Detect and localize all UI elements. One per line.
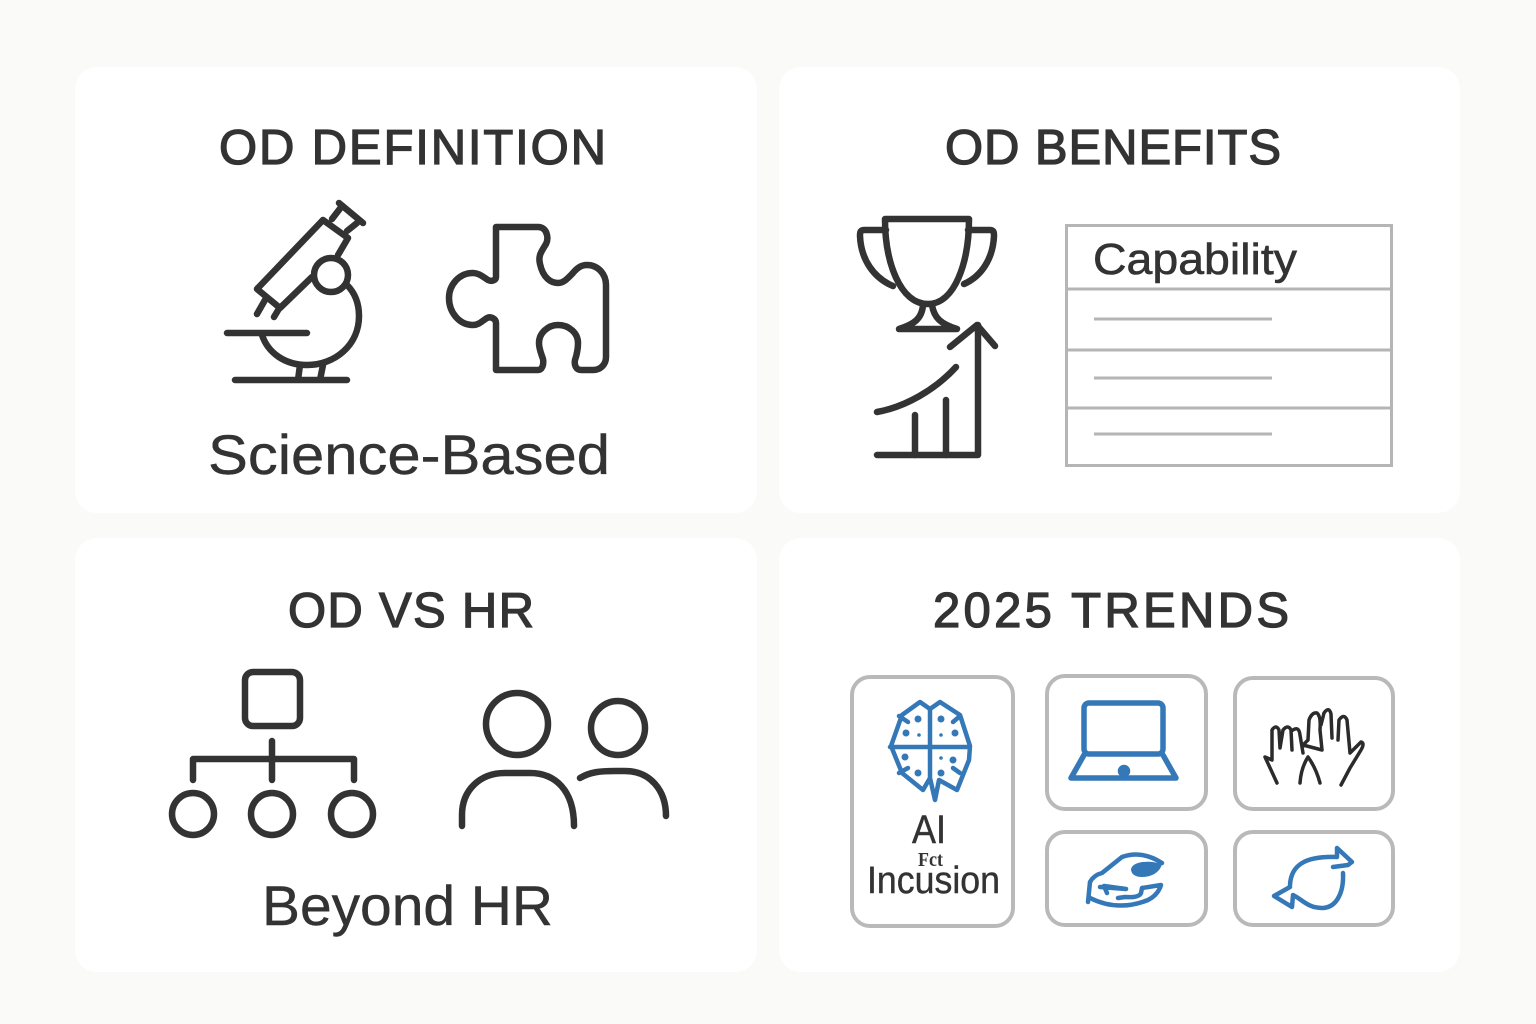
panel: OD definition bbox=[75, 67, 757, 513]
label: garbled small text: Fct bbox=[918, 849, 943, 871]
icon: laptop bbox=[1071, 703, 1176, 778]
icon: blue brain bbox=[890, 702, 970, 800]
heading: 2025 trends: 2025 TRENDS bbox=[933, 584, 1289, 638]
icon: raised hands bbox=[1265, 710, 1363, 785]
icon: growth chart with arrow bbox=[877, 325, 995, 455]
icon: org chart bbox=[172, 672, 373, 835]
icon: trophy bbox=[860, 219, 994, 329]
card: caring hand bbox=[1047, 832, 1206, 925]
icon: microscope bbox=[227, 203, 363, 380]
panel: OD vs HR bbox=[75, 538, 757, 972]
panel: 2025 trends bbox=[779, 538, 1460, 972]
table heading: Capability bbox=[1093, 235, 1297, 284]
card: laptop bbox=[1047, 676, 1206, 809]
heading: OD vs HR: OD VS HR bbox=[288, 584, 534, 638]
card: AI and inclusion bbox=[852, 677, 1013, 926]
heading: OD benefits: OD BENEFITS bbox=[945, 121, 1281, 175]
card: raised hands bbox=[1235, 678, 1393, 809]
caption: Beyond HR: Beyond HR bbox=[262, 874, 553, 937]
label: AI: AI bbox=[912, 808, 946, 852]
card: cycle arrows bbox=[1235, 832, 1393, 925]
label: Incusion: Incusion bbox=[867, 860, 1000, 902]
icon: cycle arrows bbox=[1274, 848, 1352, 908]
icon: caring hand bbox=[1088, 855, 1162, 906]
table: capability bbox=[1066, 226, 1392, 466]
panel: OD benefits bbox=[779, 67, 1460, 513]
heading: OD definition: OD DEFINITION bbox=[219, 121, 606, 175]
caption: Science-Based: Science-Based bbox=[208, 423, 610, 486]
icon: people bbox=[462, 693, 666, 826]
icon: puzzle piece bbox=[449, 227, 606, 370]
